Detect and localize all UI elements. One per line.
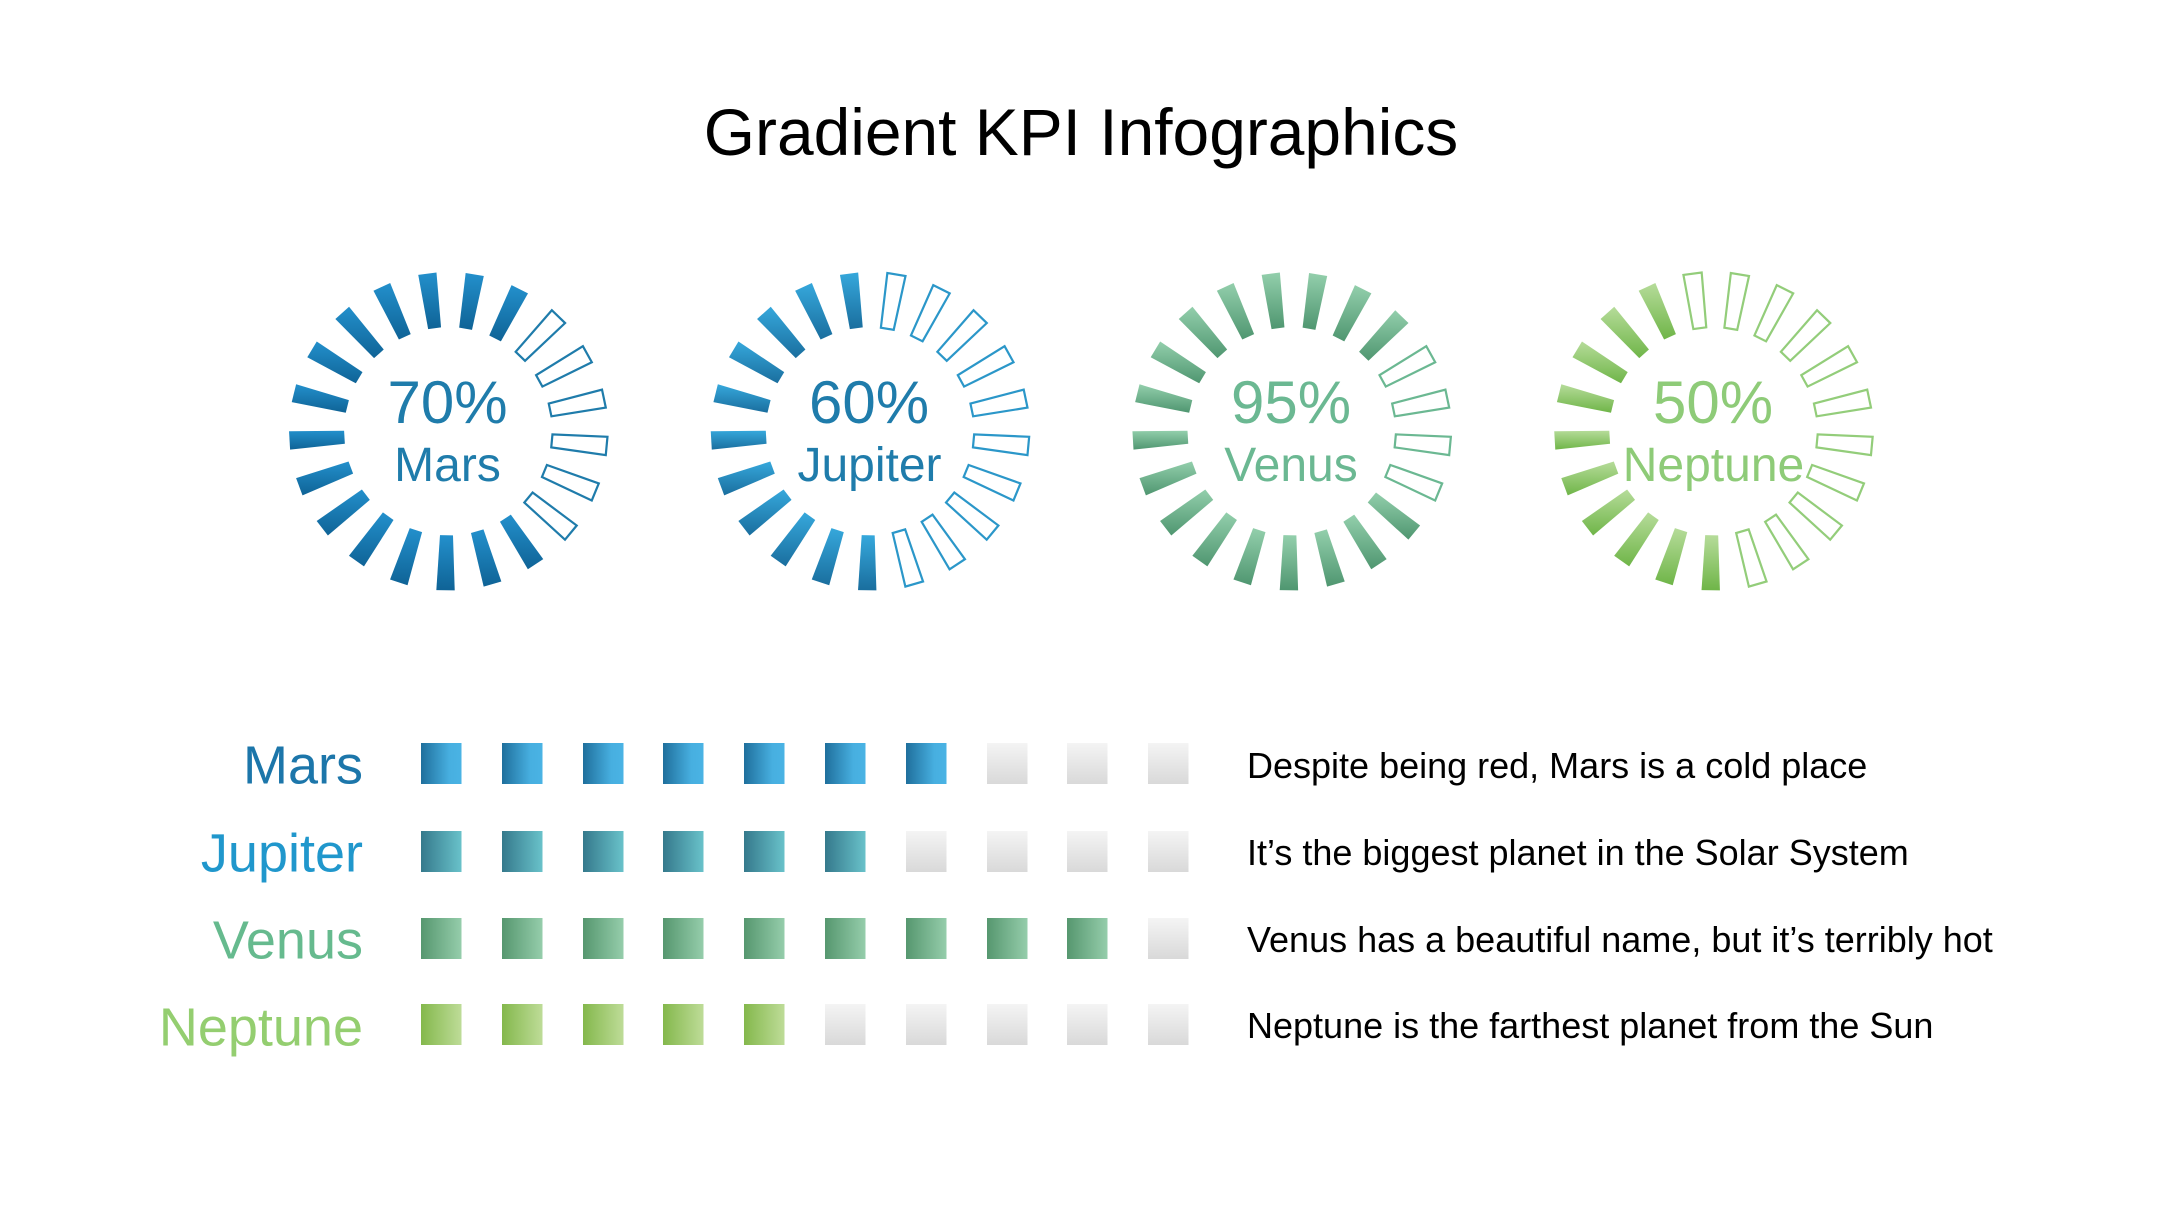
panel: Mars radial gauge [286, 270, 610, 593]
panel: Mars row [243, 736, 1867, 796]
panel: Jupiter row [201, 824, 1909, 884]
gauge ring: Jupiter 60% [708, 270, 1032, 593]
percentage: Venus: 95% [1231, 369, 1351, 436]
gauge ring: Mars 70% [286, 270, 610, 593]
panel: Venus row [213, 910, 1993, 970]
square meter: Neptune 5 of 10 [421, 1004, 1188, 1045]
panel: Venus radial gauge [1130, 270, 1454, 593]
square meter: Venus 9 of 10 [421, 918, 1188, 959]
gauge ring: Neptune 50% [1552, 270, 1875, 593]
square meter: Jupiter 6 of 10 [421, 831, 1188, 872]
description: Mars: Despite being red, Mars is a cold place [1247, 745, 1867, 786]
percentage: Jupiter: 60% [809, 369, 929, 436]
panel: Jupiter radial gauge [708, 270, 1032, 593]
row label: Mars: Mars [243, 736, 363, 796]
gauge label: Mars: Mars [394, 439, 501, 492]
panel: Neptune row [159, 998, 1933, 1058]
description: Jupiter: It’s the biggest planet in the Solar System [1247, 832, 1909, 873]
panel: Neptune radial gauge [1552, 270, 1875, 593]
title: Gradient KPI Infographics [704, 95, 1458, 169]
gauge label: Neptune: Neptune [1623, 439, 1804, 492]
gauge ring: Venus 95% [1130, 270, 1454, 593]
gauge label: Venus: Venus [1224, 439, 1358, 492]
gauge label: Jupiter: Jupiter [797, 439, 942, 492]
description: Neptune: Neptune is the farthest planet from the Sun [1247, 1005, 1933, 1046]
square meter: Mars 7 of 10 [421, 743, 1188, 784]
row label: Neptune: Neptune [159, 998, 363, 1058]
row label: Jupiter: Jupiter [201, 824, 363, 884]
row label: Venus: Venus [213, 910, 363, 970]
percentage: Mars: 70% [387, 369, 508, 436]
description: Venus: Venus has a beautiful name, but it’s terribly hot [1247, 919, 1993, 960]
percentage: Neptune: 50% [1653, 369, 1773, 436]
